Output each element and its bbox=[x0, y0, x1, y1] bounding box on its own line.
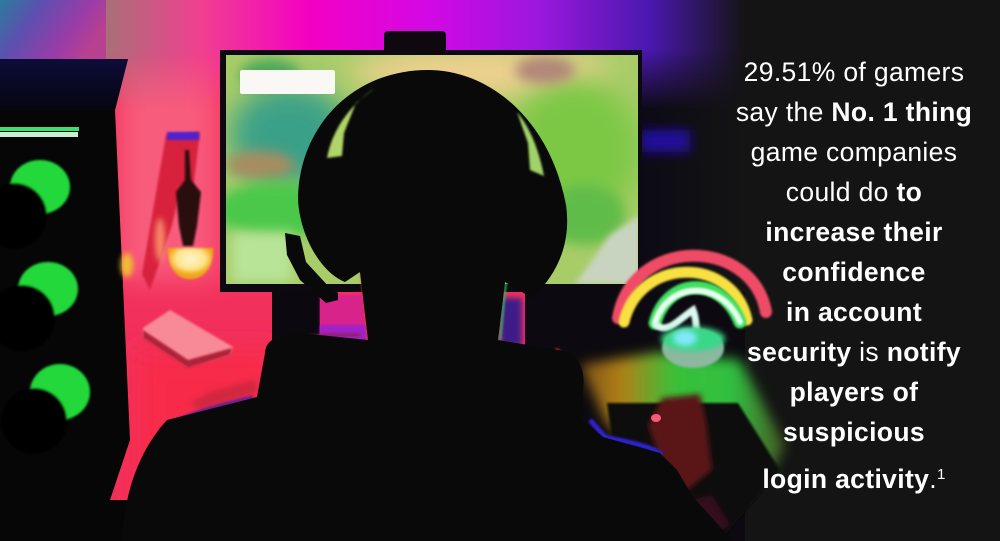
line 3: game companies bbox=[751, 137, 957, 167]
room background bbox=[0, 0, 745, 541]
line 11: login activity.1 bbox=[762, 464, 946, 494]
gamer silhouette with headset bbox=[122, 70, 733, 541]
fan glow 2 bbox=[0, 262, 78, 351]
line 5: increase their bbox=[765, 217, 943, 247]
headband gap right bbox=[517, 112, 544, 176]
neon rainbow sign bbox=[618, 256, 766, 368]
headset microphone bbox=[285, 233, 338, 303]
line 4: could do to bbox=[786, 177, 922, 207]
line 8: security is notify bbox=[747, 337, 961, 367]
line 10: suspicious bbox=[783, 417, 925, 447]
text block: statistic bbox=[736, 57, 972, 494]
monitor bbox=[215, 31, 642, 348]
left PC tower bbox=[0, 59, 130, 541]
fan glow 1 bbox=[0, 160, 70, 249]
line 7: in account bbox=[786, 297, 922, 327]
line 1: 29.51% of gamers bbox=[744, 57, 964, 87]
headband gap left bbox=[327, 88, 375, 158]
fan glow 3 bbox=[1, 364, 90, 454]
line 9: players of bbox=[790, 377, 918, 407]
line 6: confidence bbox=[782, 257, 926, 287]
line 2: say the No. 1 thing bbox=[736, 97, 972, 127]
rim light on body bbox=[160, 270, 662, 455]
photo: gamer silhouette in neon-lit room bbox=[0, 0, 790, 541]
desk with glow bbox=[555, 350, 785, 541]
desk lamp bbox=[121, 132, 258, 410]
